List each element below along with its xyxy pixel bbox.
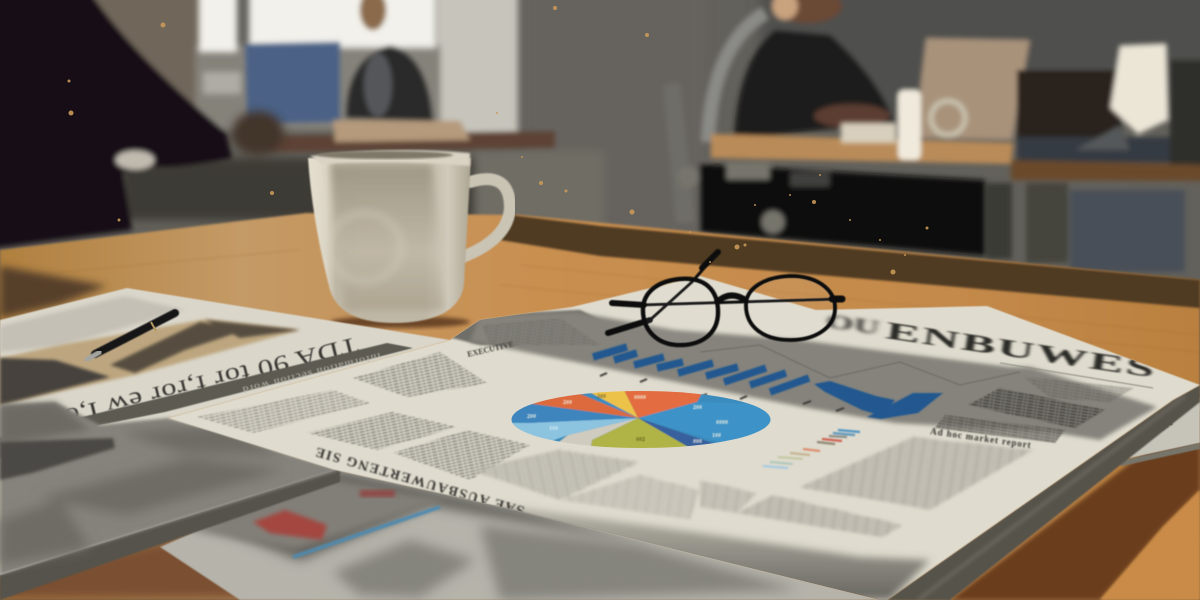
coffee mug (308, 150, 510, 328)
chair (663, 83, 695, 224)
pie slice green (590, 418, 688, 448)
mug rim inner (317, 151, 453, 159)
sill highlight (203, 72, 241, 94)
masthead: ENBUWES (884, 317, 1158, 383)
pie labels: 1## (712, 433, 721, 439)
dark under table right (700, 164, 985, 256)
glasses near arm (640, 299, 840, 305)
newspaper: back right sheet (1115, 398, 1200, 466)
dark text blocks in shadow (482, 318, 1134, 443)
back page text (0, 296, 185, 352)
banner caption: information section word (241, 350, 382, 394)
pie slice big blue (638, 402, 770, 442)
right wall (760, 0, 1200, 120)
lower sheet red photo (253, 510, 327, 540)
right wood shade (950, 410, 1200, 600)
small column heading: EXECUTIVE (466, 339, 515, 359)
lower sheet blue rule (293, 507, 440, 557)
mug reflection (329, 213, 401, 281)
bridge (716, 295, 747, 303)
body text blocks left (197, 352, 530, 480)
blurred laptop left (245, 42, 340, 124)
lower sheet red mark upper (360, 490, 395, 497)
table far edge band (500, 215, 1200, 308)
photo dark foreground (0, 358, 110, 405)
far table left (268, 120, 555, 152)
yellow photo accent (45, 358, 78, 362)
foreground person silhouette left (0, 0, 232, 250)
bottom shadow on sheet (500, 505, 930, 600)
lower sheet text blocks (333, 525, 800, 600)
mug body (308, 158, 471, 323)
photo base (0, 319, 300, 405)
pie slice medium blue (533, 416, 636, 422)
left table shadow (0, 266, 107, 318)
color legend (763, 430, 860, 468)
main sheet page edge highlight (918, 396, 1185, 600)
paper on far table (841, 123, 896, 143)
chart shadow band (470, 312, 1157, 440)
back right sheet edge (1115, 443, 1200, 466)
bar chart tall block (814, 381, 895, 416)
table legs right (986, 183, 1068, 263)
headline shadow (0, 402, 90, 445)
right person (708, 0, 895, 142)
mug contact shadow (330, 316, 470, 328)
ad hoc caption: Ad hoc market report (930, 426, 1032, 450)
left stack page edge (0, 468, 340, 600)
left wall (60, 0, 210, 170)
far table right (711, 134, 1013, 164)
pie slice light blue (512, 418, 636, 440)
pie labels: 2## (563, 400, 572, 406)
pie labels: 1## (549, 426, 558, 432)
shadow tip highlight (800, 340, 1030, 367)
pie labels: 2## (693, 405, 702, 411)
window pane right (249, 0, 436, 48)
hand of silhouette (232, 111, 284, 155)
under table dark left (122, 158, 522, 220)
pen tip (86, 352, 100, 360)
hinge left (612, 303, 644, 305)
body text blocks right (470, 437, 1033, 537)
pale column (436, 0, 518, 135)
mug handle (460, 179, 510, 258)
pie slice dark blue (640, 418, 714, 446)
sunlit wood patch (1100, 490, 1200, 600)
main sheet page edge stack (887, 385, 1200, 600)
background: blurred cafe wall (0, 0, 1200, 300)
dark box right (1017, 70, 1122, 140)
grey under window (195, 45, 440, 130)
blue grey floor right (1070, 190, 1185, 272)
dust particles (68, 6, 928, 274)
right lens (746, 276, 835, 340)
dark edge right (1170, 60, 1200, 170)
dark banner (0, 343, 413, 458)
left stack shaded area (0, 402, 340, 575)
dark title strip on shaded sheet (0, 438, 115, 480)
blurred person left (346, 0, 433, 122)
masthead start: OU (824, 310, 881, 339)
masthead rule (1000, 363, 1153, 388)
shadow beneath main sheet (200, 470, 650, 560)
grey bag right (1075, 125, 1130, 150)
glasses far arm (650, 252, 718, 320)
trend line (700, 345, 1020, 385)
inverted headline: TDA 90 tor f,ror ew I,ou sto (1, 332, 361, 446)
pie slice orange (624, 391, 702, 418)
dark blue box right (1017, 137, 1187, 163)
pie labels: ### (693, 439, 702, 445)
shaded text blocks (0, 425, 285, 565)
photo dark blobs (110, 320, 300, 373)
pie slice red (530, 394, 638, 418)
main sheet surface (168, 276, 1200, 600)
bokeh and stool under table (677, 162, 830, 234)
pie labels: ##2 (636, 437, 645, 443)
left lens (643, 279, 718, 345)
background: blurred cafe scene (0, 0, 1200, 272)
lower sheet photo (190, 478, 445, 550)
wood grain (30, 250, 1200, 540)
right laptop (914, 38, 1030, 140)
wooden table top (0, 213, 1200, 600)
back right sheet text: G.4 (1156, 417, 1175, 435)
arm tip far (702, 252, 718, 268)
newspaper: lower sheet under the stack (160, 470, 880, 600)
reading glasses (608, 252, 842, 345)
pie labels: 2## (597, 394, 606, 400)
mug vertical shading (330, 165, 445, 310)
centre wall (525, 0, 705, 235)
bar ticks (600, 373, 844, 411)
newspaper: main sheet (168, 276, 1200, 600)
pen band (151, 322, 156, 331)
pie slice grey (558, 418, 637, 446)
pie labels: 2## (527, 414, 536, 420)
blurred white cup left (115, 150, 155, 170)
far mug right (898, 90, 965, 160)
left stack sunlit top (0, 288, 450, 575)
dark top left sheet (452, 308, 596, 346)
pie labels (527, 394, 728, 445)
pie chart (512, 391, 770, 448)
arm tip near (608, 320, 650, 333)
inverted heading on main sheet: SAE AUSBAUWERTENG SIE (313, 443, 526, 518)
pie labels: #### (716, 420, 728, 426)
white object right (1110, 44, 1168, 134)
bar chart (593, 347, 943, 419)
newspaper: left stack (0, 288, 450, 600)
wall behind mug right (474, 150, 604, 240)
window pane left (199, 0, 237, 52)
bottom left wood shade (0, 530, 320, 600)
far table right extension (1011, 160, 1200, 181)
mug rim (310, 150, 470, 166)
hinge right (832, 296, 842, 302)
pen (86, 313, 175, 360)
bar chart last bar (867, 393, 943, 419)
pie labels: #### (634, 395, 646, 401)
pie slice yellow (590, 391, 638, 418)
